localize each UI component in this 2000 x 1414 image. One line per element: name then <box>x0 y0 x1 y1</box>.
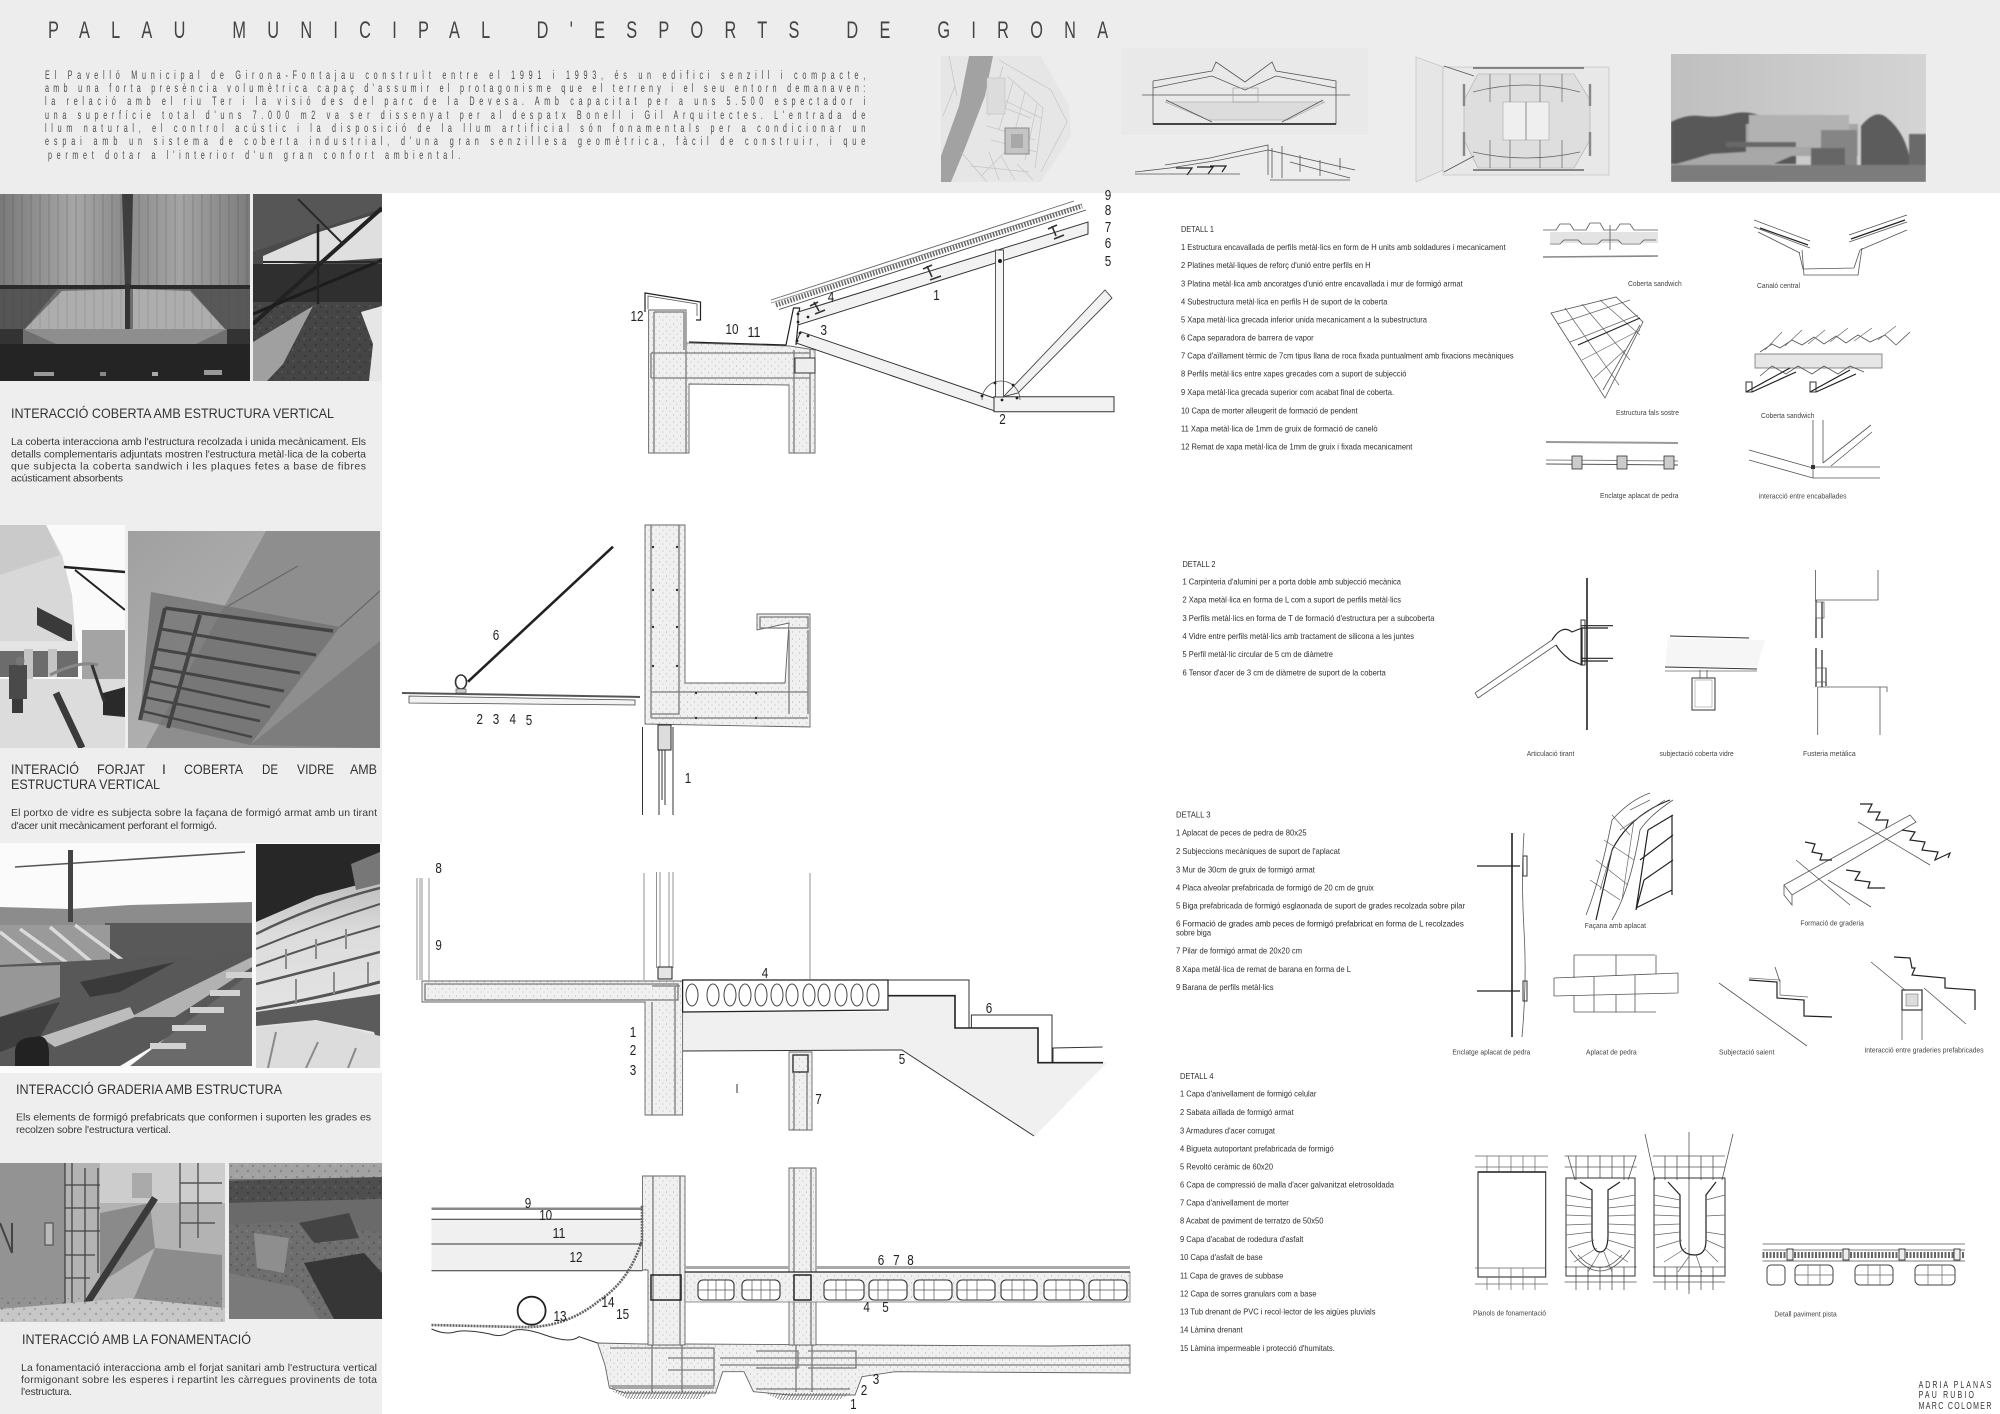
plan: foundation plan C <box>1645 1132 1733 1294</box>
legend: detail 4: 2 Sabata aïllada de formigó armat <box>1180 1108 1294 1117</box>
section 2 labels: 2 <box>476 712 483 728</box>
legend: detail 3: 7 Pilar de formigó armat de 20x20 cm <box>1176 947 1302 956</box>
text block: section 2: d'acer unit mecànicament perforant el formigó. <box>11 820 217 832</box>
caption: Coberta sandwich <box>1628 279 1682 288</box>
plan: foundation plan B <box>1565 1156 1637 1290</box>
section 3 labels: 9 <box>435 938 442 954</box>
legend: detail 3: 5 Biga prefabricada de formigó esglaonada de suport de grades recolzada sobre pilar <box>1176 901 1465 910</box>
photo: interior roof <box>0 194 250 381</box>
construction drawing: detail 3 stands <box>417 861 1107 1137</box>
section 1 labels: 9 <box>1105 188 1111 204</box>
heading: section 2: COBERTA <box>184 761 244 777</box>
legend: detail 2: 3 Perfils metàl·lics en forma de T de formació d'estructura per a subcoberta <box>1182 614 1435 623</box>
sketch: coberta sandwich <box>1543 223 1658 257</box>
legend: detail 2: 6 Tensor d'acer de 3 cm de diàmetre de suport de la coberta <box>1182 668 1386 677</box>
building plan drawing <box>1416 57 1609 182</box>
text block: section 4: l'estructura. <box>21 1386 72 1398</box>
sketch: aplacat de pedra <box>1554 955 1678 1012</box>
drainage membrane <box>432 1205 642 1327</box>
legend: detail 4 <box>1180 1072 1394 1353</box>
L-shaped seating pieces <box>888 980 969 1028</box>
legend: detail 1: 6 Capa separadora de barrera de vapor <box>1181 334 1314 343</box>
intro text block <box>45 69 866 163</box>
heading: section 3: INTERACCIÓ GRADERIA AMB ESTRUCTURA <box>16 1081 283 1097</box>
legend: detail 4: 10 Capa d'asfalt de base <box>1180 1253 1263 1262</box>
heading: section 2: I <box>162 761 166 777</box>
section 2 labels: 5 <box>526 713 532 729</box>
legend: detail 2: 4 Vidre entre perfils metàl·lics amb tractament de silicona a les juntes <box>1182 632 1414 641</box>
section 1 labels: 2 <box>999 412 1006 428</box>
photo: seating <box>256 844 380 1068</box>
intro text block: El Pavelló Municipal de Girona-Fontajau construït entre el 1991 i 1993, és un edifici senzill i compacte, <box>45 69 865 83</box>
sketch: formació de graderia <box>1784 804 1950 907</box>
caption: Interacció entre graderies prefabricades <box>1864 1046 1984 1055</box>
legend: detail 3: 9 Barana de perfils metàl·lics <box>1176 983 1274 992</box>
section 4 labels: 10 <box>539 1208 552 1224</box>
section 1 labels: 11 <box>748 325 760 341</box>
authors: ADRIA PLANAS <box>1919 1379 1992 1390</box>
section 3 labels: 5 <box>899 1052 905 1068</box>
caption: Planols de fonamentació <box>1473 1308 1546 1317</box>
foundation mass <box>598 1343 1130 1395</box>
concrete slab and wall <box>422 981 683 1115</box>
legend: detail 1: 1 Estructura encavallada de perfils metàl·lics en form de H units amb soldadures i mecanicament <box>1181 243 1506 252</box>
construction drawing: detail 4 foundations <box>432 1168 1130 1413</box>
panel: header band <box>0 0 2000 193</box>
authors: PAU RUBIO <box>1919 1389 1974 1400</box>
legend: detail 2: 1 Carpinteria d'alumini per a porta doble amb subjecció mecànica <box>1182 578 1401 587</box>
sketch: interacció entre encavallades <box>1749 420 1880 478</box>
legend: detail 4: 6 Capa de compressió de malla d'acer galvanitzat eletrosoldada <box>1180 1181 1394 1190</box>
sketch: enclatge aplacat <box>1546 442 1678 469</box>
legend: detail 3: 4 Placa alveolar prefabricada de formigó de 20 cm de gruix <box>1176 883 1374 892</box>
legend: detail 1: 2 Platines metàl·liques de reforç d'unió entre perfils en H <box>1181 261 1371 270</box>
legend: detail 4: 8 Acabat de paviment de terratzo de 50x50 <box>1180 1217 1324 1226</box>
text block: section 1: acústicament absorbents <box>11 472 123 484</box>
legend: detail 1: 3 Platina metàl·lica amb ancoratges d'unió entre encavallada i mur de formigó armat <box>1181 279 1463 288</box>
section 4 labels <box>525 1196 914 1413</box>
photo: construction crane <box>0 850 252 1066</box>
sketch: fusteria metàl·lica <box>1816 570 1887 735</box>
caption: Articulació tirant <box>1527 749 1575 758</box>
text block: section 1 <box>11 436 366 484</box>
glass canopy slab <box>402 693 640 705</box>
stepped beam <box>683 996 1107 1137</box>
section 4 labels: 4 <box>863 1300 870 1316</box>
caption: Aplacat de pedra <box>1586 1048 1637 1057</box>
section 1 labels: 8 <box>1105 203 1111 219</box>
sketch: canaló central <box>1754 215 1907 275</box>
section 1 labels: 5 <box>1105 254 1111 270</box>
heading: section 2: INTERACIÓ <box>11 761 79 777</box>
section 3 labels: 1 <box>630 1025 636 1041</box>
legend: detail 3: 8 Xapa metàl·lica de remat de barana en forma de L <box>1176 965 1351 974</box>
section 1 labels: 1 <box>933 288 940 304</box>
legend: detail 3 <box>1176 810 1465 992</box>
site plan map <box>941 56 1068 182</box>
heading: section 1: INTERACCIÓ COBERTA AMB ESTRUCTURA VERTICAL <box>11 405 334 421</box>
legend: detail 4: DETALL 4 <box>1180 1072 1214 1081</box>
exterior photograph <box>1671 54 1926 182</box>
legend: detail 1: 7 Capa d'aïllament tèrmic de 7cm tipus llana de roca fixada puntualment amb fixacions mecàniques <box>1181 352 1514 361</box>
section 4 labels: 9 <box>525 1196 531 1212</box>
sketch: subjectació coberta vidre <box>1665 636 1765 710</box>
caption: Subjectació saient <box>1719 1048 1775 1057</box>
caption: Enclatge aplacat de pedra <box>1600 491 1679 500</box>
legend: detail 1: 5 Xapa metàl·lica grecada inferior unida mecanicament a la subestructura <box>1181 315 1427 324</box>
heading: section 2: ESTRUCTURA VERTICAL <box>11 776 160 792</box>
sketch: enclatge aplacat de pedra <box>1477 833 1527 1037</box>
photo: excavation <box>229 1163 382 1319</box>
legend: detail 1: 11 Xapa metàl·lica de 1mm de gruix de formació de canelò <box>1181 424 1378 433</box>
photo: facade with canopy tie <box>0 525 125 748</box>
section 3 labels: 8 <box>435 861 442 877</box>
upper chord <box>798 222 1088 325</box>
legend: detail 4: 4 Bigueta autoportant prefabricada de formigó <box>1180 1144 1334 1153</box>
lower chord <box>796 332 994 411</box>
legend: detail 1: DETALL 1 <box>1181 225 1214 234</box>
text block: section 4: formigonant sobre les esperes i repartint les càrregues provinents de tota <box>21 1374 377 1386</box>
construction drawing: detail 1 roof <box>630 188 1114 453</box>
text block: section 3: recolzen sobre l'estructura vertical. <box>16 1124 171 1136</box>
heading: section 2 <box>11 761 377 792</box>
legend: detail 3: 6 Formació de grades amb peces de formigó prefabricat en forma de L recolzades <box>1176 919 1464 928</box>
caption: Canaló central <box>1757 281 1800 290</box>
section 1 labels: 4 <box>828 290 834 306</box>
intro text block: amb una forta presència volumètrica capaç d'assumir el protagonisme que el terreny i el seu entorn demanaven: <box>45 82 865 96</box>
ring connector <box>456 675 466 689</box>
section 4 labels: 6 <box>878 1253 884 1269</box>
section 3 labels: 4 <box>762 966 768 982</box>
legend: detail 2: DETALL 2 <box>1182 560 1216 569</box>
section 2 labels <box>476 628 691 787</box>
heading: section 2: VIDRE <box>297 761 334 777</box>
photo: foundations scaffolding <box>0 1163 225 1322</box>
door mullion and screens <box>644 872 810 980</box>
legend: detail 4: 1 Capa d'anivellament de formigó celular <box>1180 1090 1317 1099</box>
caption: Detall paviment pista <box>1774 1310 1837 1319</box>
legend: detail 4: 12 Capa de sorres granulars com a base <box>1180 1289 1317 1298</box>
strip behind construction photos <box>0 843 382 1073</box>
section 2 labels: 1 <box>685 771 691 787</box>
legend: detail 4: 15 Làmina impermeable i protecció d'humitats. <box>1180 1344 1335 1353</box>
legend: detail 3: 1 Aplacat de peces de pedra de 80x25 <box>1176 829 1307 838</box>
section 3 labels: 2 <box>630 1043 636 1059</box>
caption: subjectació coberta vidre <box>1660 749 1734 758</box>
section 1 labels: 10 <box>726 322 738 338</box>
heading: section 2: FORJAT <box>97 761 145 777</box>
legend: detail 3: 3 Mur de 30cm de gruix de formigó armat <box>1176 865 1315 874</box>
section 2 labels: 4 <box>509 712 516 728</box>
authors <box>1919 1379 1992 1411</box>
footing hatching <box>612 1391 852 1400</box>
photo: roof truss <box>253 194 382 381</box>
section 4 labels: 8 <box>907 1253 914 1269</box>
caption: Fusteria metàlica <box>1803 749 1856 758</box>
section 4 labels: 7 <box>893 1253 900 1269</box>
section 3 labels: 7 <box>815 1092 822 1108</box>
photo: glass canopy <box>128 531 380 748</box>
section 4 labels: 3 <box>873 1372 879 1388</box>
section 3 labels: 3 <box>630 1063 636 1079</box>
title: PALAU MUNICIPAL D'ESPORTS DE GIRONA <box>48 17 1108 44</box>
legend: detail 1: 12 Remat de xapa metàl·lica de 1mm de gruix i fixada mecanicament <box>1181 442 1413 451</box>
legend: detail 2: 2 Xapa metàl·lica en forma de L com a suport de perfils metàl·lics <box>1182 596 1401 605</box>
text block: section 2: El portxo de vidre es subjecta sobre la façana de formigó armat amb un tirant <box>11 807 377 819</box>
legend: detail 4: 11 Capa de graves de subbase <box>1180 1271 1284 1280</box>
sandwich roof layers <box>771 201 1086 310</box>
section 4 labels: 15 <box>616 1307 629 1323</box>
pillar <box>789 1052 812 1130</box>
text block: section 4 <box>21 1362 377 1398</box>
steel tie cable <box>468 547 613 682</box>
caption: Formació de graderia <box>1800 919 1864 928</box>
section 1 labels: 6 <box>1105 236 1111 252</box>
section 4 labels: 14 <box>602 1295 614 1311</box>
legend: detail 2: 5 Perfil metàl·lic circular de 5 cm de diàmetre <box>1182 650 1333 659</box>
text block: section 3: Els elements de formigó prefabricats que conformen i suporten les grades es <box>16 1112 371 1124</box>
sketch: estructura fals sostre <box>1551 297 1643 398</box>
text block: section 1: detalls complementaris adjuntats mostren l'estructura metàl·lica de la coberta <box>11 448 366 460</box>
sketch: detall paviment pista <box>1762 1244 1965 1285</box>
text block: section 3 <box>16 1112 371 1136</box>
legend: detail 4: 14 Làmina drenant <box>1180 1326 1243 1335</box>
section 1 labels: 3 <box>820 323 827 339</box>
legend: detail 3: DETALL 3 <box>1176 810 1211 820</box>
building perspective sketch <box>1135 145 1355 180</box>
legend: detail 4: 13 Tub drenant de PVC i recol·lector de les aigües pluvials <box>1180 1308 1376 1317</box>
section 3 labels <box>435 861 992 1108</box>
caption: Estructura fals sostre <box>1616 408 1679 417</box>
columns <box>642 1168 816 1345</box>
pavement layers <box>432 1208 642 1271</box>
legend: detail 4: 5 Revoltó ceràmic de 60x20 <box>1180 1162 1273 1171</box>
intro text block: llum natural, el control acústic i la disposició de la llum artificial són fonamentals per a condicionar un <box>45 122 865 136</box>
caption: Enclatge aplacat de pedra <box>1452 1048 1531 1057</box>
panel: left column background <box>0 193 382 1414</box>
text block: section 1: que subjecta la coberta sandwich i les plaques fetes a base de fibres <box>11 460 366 472</box>
intro text block: una superfície total d'uns 7.000 m2 va ser dissenyat per al despatx Bonell i Gil Arquitectes. L'entrada de <box>45 109 866 123</box>
section 4 labels: 13 <box>554 1309 566 1325</box>
section 4 labels: 11 <box>552 1226 566 1242</box>
sketch: coberta sandwich isometric <box>1746 326 1910 392</box>
legend: detail 1: 10 Capa de morter alleugerit de formació de pendent <box>1181 406 1358 415</box>
heading: section 4: INTERACCIÓ AMB LA FONAMENTACIÓ <box>22 1331 251 1347</box>
legend: detail 4: 9 Capa d'acabat de rodedura d'asfalt <box>1180 1235 1304 1244</box>
legend: detail 1: 8 Perfils metàl·lics entre xapes grecades com a suport de subjecció <box>1181 370 1407 379</box>
legend: detail 1: 9 Xapa metàl·lica grecada superior com acabat final de coberta. <box>1181 388 1394 397</box>
intro text block: la relació amb el riu Ter i la visió des del parc de la Devesa. Amb capacitat per a uns 5.500 espectador i <box>45 95 865 109</box>
floor slab and block vaults <box>651 1266 1130 1302</box>
sketch: subjectació saient <box>1719 967 1832 1046</box>
caption: Coberta sandwich <box>1761 411 1814 420</box>
ground line <box>432 1329 598 1343</box>
plan: foundation plan A <box>1475 1156 1548 1290</box>
sketch: façana amb aplacat <box>1586 793 1673 920</box>
heading: section 2: AMB <box>350 761 377 777</box>
intro text block: permet dotar a l'interior d'un gran confort ambiental. <box>48 149 460 163</box>
legend: detail 3: 2 Subjeccions mecàniques de suport de l'aplacat <box>1176 847 1341 856</box>
heading: section 2: DE <box>262 761 278 777</box>
legend: detail 1: 4 Subestructura metàl·lica en perfils H de suport de la coberta <box>1181 297 1388 306</box>
section 2 labels: 3 <box>493 712 499 728</box>
section 1 labels: 12 <box>630 309 644 325</box>
section 4 labels: 1 <box>850 1397 857 1413</box>
door frame <box>642 725 673 815</box>
sketch: articulació tirant <box>1475 578 1613 730</box>
legend: detail 2 <box>1182 560 1435 677</box>
drain pipe <box>518 1297 546 1325</box>
authors: MARC COLOMER <box>1919 1400 1991 1411</box>
section 1 labels: 7 <box>1105 220 1111 236</box>
railing <box>417 878 429 980</box>
caption: interacció entre encaballades <box>1759 492 1847 501</box>
sketch: interacció entre graderies <box>1871 957 1975 1040</box>
construction drawing: detail 2 canopy <box>402 525 810 815</box>
text block: section 2 <box>11 807 377 832</box>
section 4 labels: 12 <box>570 1250 582 1266</box>
intro text block: espai amb un sistema de coberta industrial, d'una gran senzillesa geomètrica, fàcil de construir, i que <box>45 135 866 149</box>
section 1 labels <box>630 188 1111 428</box>
legend: detail 1 <box>1181 225 1514 451</box>
text block: section 4: La fonamentació interacciona amb el forjat sanitari amb l'estructura vertical <box>21 1362 377 1374</box>
building section drawing <box>1121 48 1368 135</box>
legend: detail 3: sobre biga <box>1176 929 1211 938</box>
section 4 labels: 5 <box>882 1300 889 1316</box>
purlins <box>810 225 1064 314</box>
section 2 labels: 6 <box>493 628 499 644</box>
section 4 labels: 2 <box>861 1383 867 1399</box>
text block: section 1: La coberta interacciona amb l'estructura recolzada i unida mecànicament. Els <box>11 436 366 448</box>
legend: detail 4: 7 Capa d'anivellament de morter <box>1180 1199 1289 1208</box>
anchor plate bolts <box>796 259 1018 401</box>
section 3 labels: 6 <box>986 1001 992 1017</box>
hollow core slab <box>683 980 888 1012</box>
legend: detail 4: 3 Armadures d'acer corrugat <box>1180 1126 1276 1135</box>
caption: Façana amb aplacat <box>1585 921 1647 930</box>
